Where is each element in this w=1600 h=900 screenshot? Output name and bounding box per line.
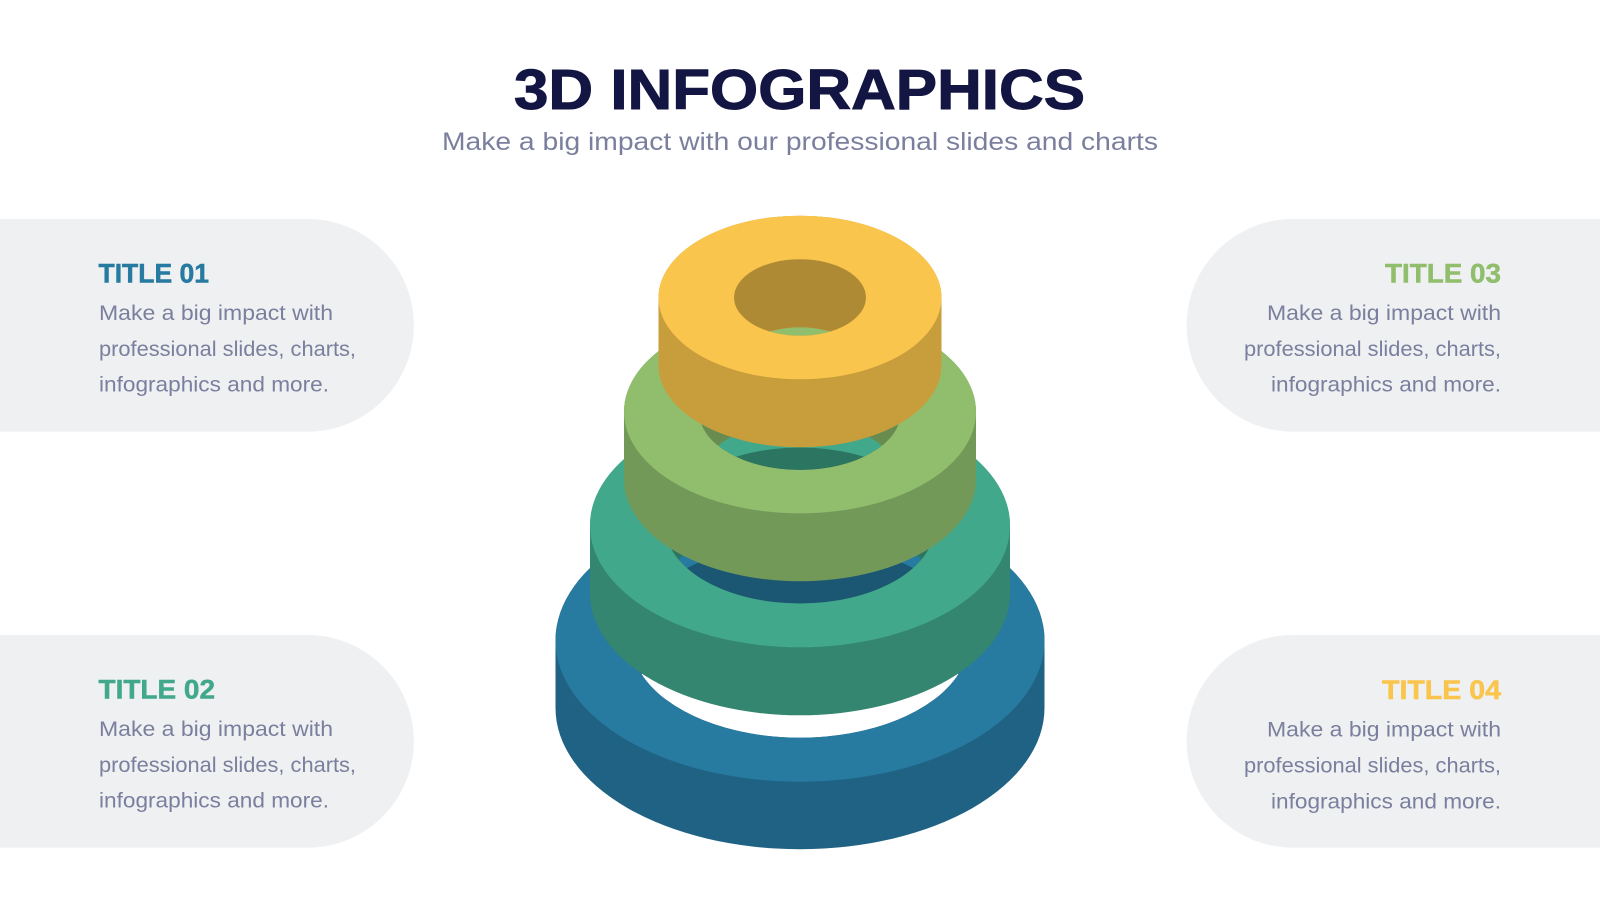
heading: title 03: TITLE 03	[1385, 259, 1501, 289]
text block: title 02 body: infographics and more.	[99, 790, 329, 813]
text block: title 03 body	[1244, 302, 1501, 397]
heading: title 01: TITLE 01	[98, 259, 209, 289]
panel: title 04	[1187, 635, 1600, 848]
panel: title 03	[1187, 219, 1600, 432]
subtitle: Make a big impact with our professional slides and charts	[442, 128, 1158, 156]
text block: title 04 body: infographics and more.	[1271, 790, 1501, 813]
text block: title 03 body: Make a big impact with	[1267, 302, 1501, 325]
ring: teal	[590, 404, 1010, 715]
ring: green	[624, 310, 976, 581]
text block: title 01 body: infographics and more.	[99, 374, 329, 397]
text block: title 01 body: Make a big impact with	[99, 302, 333, 325]
panel: title 01	[0, 219, 414, 432]
ring: yellow top	[658, 216, 942, 447]
ring: blue base	[556, 499, 1044, 849]
text block: title 02 body: professional slides, charts,	[99, 754, 356, 777]
panel: title 02	[0, 635, 414, 848]
text block: title 03 body: professional slides, charts,	[1244, 338, 1501, 361]
text block: title 02 body: Make a big impact with	[99, 718, 333, 741]
title: 3D INFOGRAPHICS	[514, 58, 1085, 122]
text block: title 02 body	[99, 718, 356, 813]
text block: title 04 body	[1244, 719, 1501, 813]
heading: title 02: TITLE 02	[98, 674, 215, 704]
chart: 3D stacked rings	[556, 216, 1044, 849]
text block: title 03 body: infographics and more.	[1271, 374, 1501, 397]
heading: title 04: TITLE 04	[1382, 675, 1501, 705]
text block: title 04 body: Make a big impact with	[1267, 719, 1501, 742]
text block: title 01 body	[99, 302, 356, 397]
text block: title 04 body: professional slides, charts,	[1244, 754, 1501, 778]
text block: title 01 body: professional slides, charts,	[99, 338, 356, 361]
